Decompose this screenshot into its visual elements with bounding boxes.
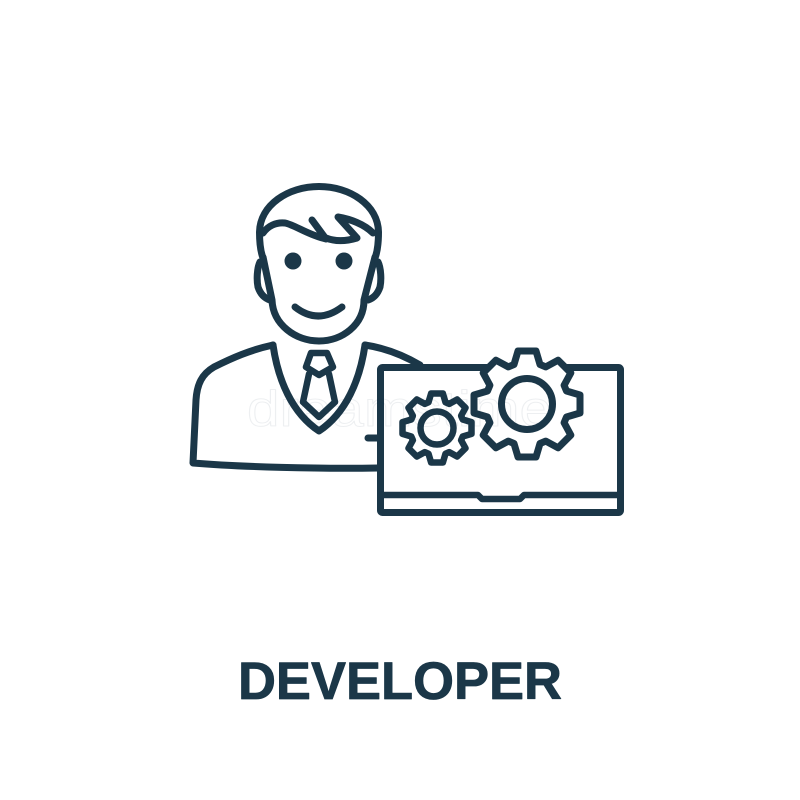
gear hub [502,378,552,430]
right ear [368,262,381,300]
left eye [284,252,302,270]
laptop body [380,368,620,512]
hair fringe [263,217,373,241]
smile [295,307,342,316]
icon: necktie [303,353,335,417]
hair outline [260,186,378,258]
right eye [336,252,352,270]
icon: developer with laptop and gears [193,186,620,512]
icon: small gear [402,394,472,462]
right shoulder [365,345,420,365]
tie knot [306,353,333,375]
icon: laptop [380,368,620,512]
tie body [303,374,335,417]
laptop clasp stub [368,434,378,442]
icon: large gear [474,351,580,457]
collar V [273,345,365,431]
icon: person torso [193,345,420,468]
face [263,257,375,341]
body outline [193,345,378,468]
icon: person head [257,186,381,341]
title: DEVELOPER [238,652,562,711]
left ear [257,262,270,300]
laptop base line [381,495,620,499]
gear outline [474,351,580,457]
gear hub [420,412,454,444]
gear outline [402,394,472,462]
watermark: dreamstime [247,381,552,437]
